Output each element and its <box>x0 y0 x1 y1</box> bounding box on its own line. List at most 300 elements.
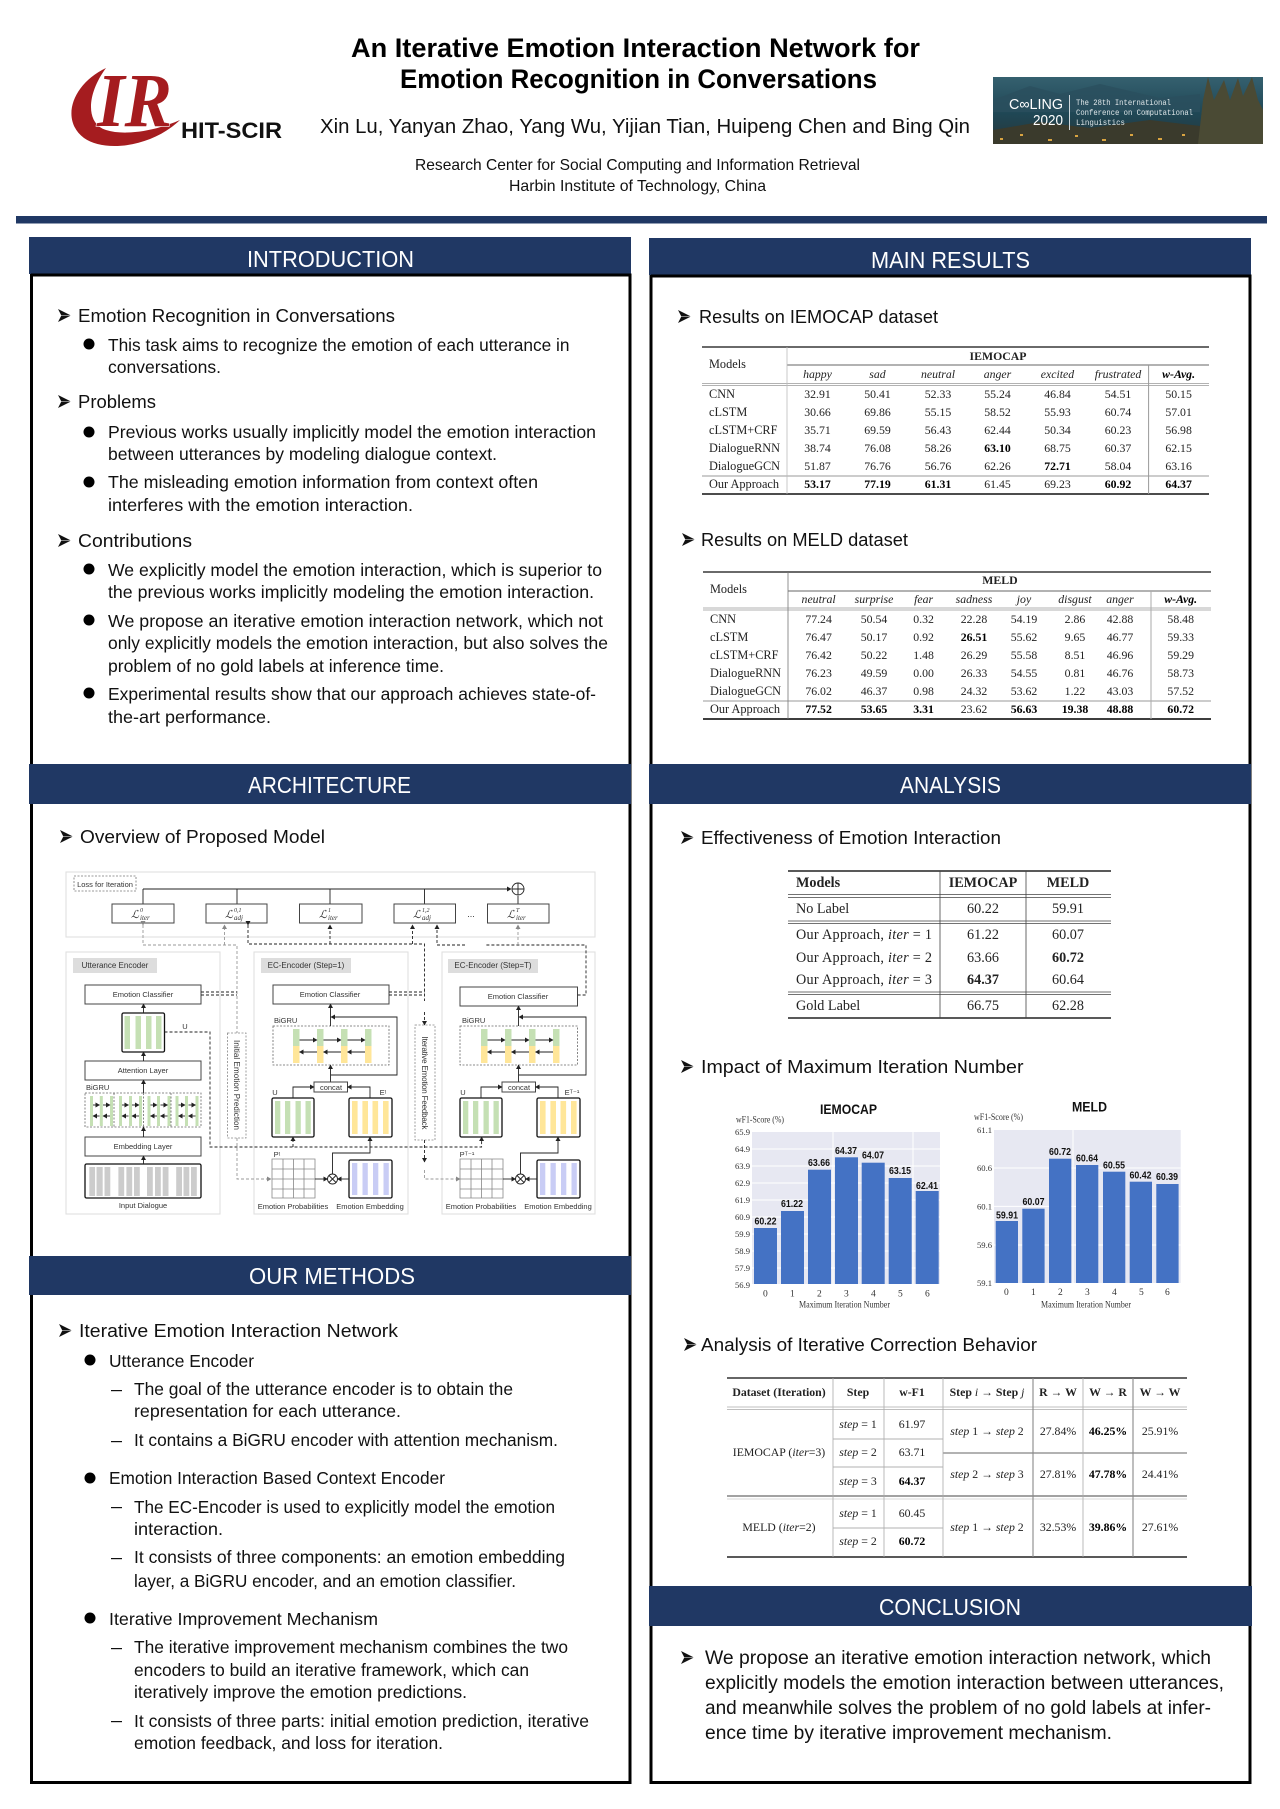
table: iemocap results: 56.98 <box>1165 423 1192 437</box>
heading: conclusion <box>649 1586 1252 1626</box>
table: meld results: w-Avg. <box>1164 592 1197 606</box>
ec-encoder step 1: BiGRU <box>274 1016 297 1025</box>
table: meld results: sadness <box>956 592 993 606</box>
logo: HIT-SCIR <box>71 59 282 146</box>
table: iemocap results: 57.01 <box>1165 405 1192 419</box>
table: correction behavior: Step <box>847 1385 870 1399</box>
table: meld results: 46.76 <box>1107 666 1133 680</box>
table: meld results: 0.98 <box>913 684 934 698</box>
bar chart: meld: wF1-Score (%) <box>974 1112 1023 1123</box>
bar chart: iemocap: 60.22 <box>754 1216 777 1227</box>
loss for iteration panel: adj <box>422 914 431 922</box>
text block: our methods: It contains a BiGRU encoder with attention mechanism. <box>134 1430 558 1450</box>
bar chart: iemocap: 65.9 <box>735 1127 750 1137</box>
affiliation: Harbin Institute of Technology, China <box>509 178 766 195</box>
table: meld results: 59.29 <box>1167 648 1194 662</box>
text block: conclusion: and meanwhile solves the problem of no gold labels at infer- <box>705 1697 1211 1719</box>
text block: conclusion: explicitly models the emotion interaction between utterances, <box>705 1672 1224 1694</box>
bar chart: iemocap: 2 <box>817 1290 822 1300</box>
bar chart: meld: Maximum Iteration Number <box>1041 1301 1132 1311</box>
ec-encoder step 1 <box>254 952 408 1214</box>
table: correction behavior: IEMOCAP (iter=3) <box>733 1445 825 1459</box>
table: iemocap results: 60.92 <box>1105 477 1131 491</box>
bar chart: iemocap: wF1-Score (%) <box>736 1115 784 1126</box>
table: effectiveness: Our Approach, iter = 2 <box>796 950 932 966</box>
table: iemocap results: 76.08 <box>864 441 891 455</box>
table: iemocap results: 62.44 <box>984 423 1011 437</box>
table: effectiveness: IEMOCAP <box>949 875 1018 891</box>
table: correction behavior: 60.72 <box>899 1534 925 1548</box>
loss for iteration panel: T <box>516 908 520 914</box>
table: iemocap results: 60.74 <box>1105 405 1131 419</box>
ec-encoder step T: Eᵀ⁻¹ <box>565 1088 580 1097</box>
text block: our methods: The EC-Encoder is used to explicitly model the emotion <box>134 1497 555 1517</box>
table: correction behavior: W → R <box>1089 1385 1127 1399</box>
heading: main results <box>649 238 1251 277</box>
table: meld results: anger <box>1106 592 1134 606</box>
bar chart: meld: 2 <box>1058 1288 1063 1298</box>
table: correction behavior: 46.25% <box>1089 1424 1127 1438</box>
ec-encoder step 1: Eᵗ <box>380 1088 387 1097</box>
table: iemocap results: 50.41 <box>864 387 891 401</box>
bar chart: meld: 60.42 <box>1130 1171 1152 1182</box>
text block: our methods: The goal of the utterance encoder is to obtain the <box>134 1379 513 1399</box>
table: meld results: 56.63 <box>1011 702 1037 716</box>
affiliation: Research Center for Social Computing and Information Retrieval <box>415 157 860 174</box>
table: iemocap results: CNN <box>709 387 735 401</box>
table: iemocap results: 62.26 <box>984 459 1011 473</box>
loss for iteration panel: ℒ <box>225 909 234 921</box>
table: iemocap results <box>702 347 1209 494</box>
table: meld results: cLSTM <box>710 630 748 644</box>
architecture diagram <box>66 872 595 1214</box>
table: meld results: 76.47 <box>805 630 832 644</box>
text block: introduction <box>58 305 608 727</box>
subheading: overview: Overview of Proposed Model <box>80 826 325 847</box>
bar chart: meld: 60.64 <box>1076 1154 1098 1165</box>
subheading: meld results: Results on MELD dataset <box>701 529 908 550</box>
table: iemocap results: 55.24 <box>984 387 1011 401</box>
bar chart: meld: 59.1 <box>977 1278 992 1288</box>
heading: analysis: ANALYSIS <box>900 772 1001 798</box>
table: effectiveness: 66.75 <box>967 998 999 1014</box>
bar chart: iemocap: 6 <box>925 1290 930 1300</box>
text block: our methods: Emotion Interaction Based Context Encoder <box>109 1468 445 1488</box>
text block: introduction: Emotion Recognition in Conversations <box>78 305 395 326</box>
table: correction behavior: step 1 → step 2 <box>950 1424 1024 1438</box>
table: meld results <box>703 572 1211 719</box>
table: iemocap results: 69.59 <box>864 423 891 437</box>
table: meld results: 60.72 <box>1167 702 1194 716</box>
table: iemocap results: 72.71 <box>1044 459 1071 473</box>
table: correction behavior: step = 2 <box>839 1534 877 1548</box>
utterance encoder panel: Utterance Encoder <box>82 961 149 970</box>
heading: main results: MAIN RESULTS <box>871 247 1030 273</box>
table: meld results: 19.38 <box>1062 702 1088 716</box>
utterance encoder panel <box>66 952 220 1214</box>
table: iemocap results: 61.45 <box>984 477 1011 491</box>
text block: conclusion: We propose an iterative emotion interaction network, which <box>705 1647 1211 1669</box>
loss for iteration panel: 0,1 <box>234 908 242 914</box>
table: iemocap results: 58.52 <box>984 405 1011 419</box>
table: correction behavior: w-F1 <box>899 1385 925 1399</box>
text block: our methods: interaction. <box>134 1519 223 1539</box>
table: iemocap results: DialogueRNN <box>709 441 780 455</box>
bar chart: meld: 6 <box>1165 1288 1170 1298</box>
logo: HIT-SCIR: HIT-SCIR <box>181 118 282 143</box>
table: correction behavior: 24.41% <box>1142 1467 1178 1481</box>
text block: our methods: representation for each utterance. <box>134 1401 401 1421</box>
text block: our methods: Utterance Encoder <box>109 1351 254 1371</box>
table: effectiveness: 60.72 <box>1052 950 1084 966</box>
table: meld results: 58.48 <box>1167 612 1194 626</box>
table: effectiveness: 60.07 <box>1052 927 1084 943</box>
bar chart: iemocap: 62.41 <box>916 1181 938 1192</box>
table: iemocap results: anger <box>984 367 1012 381</box>
logo: COLING 2020 banner: C∞LING <box>1009 96 1063 113</box>
text block: introduction: Experimental results show that our approach achieves state-of- <box>108 684 596 704</box>
table: meld results: 0.00 <box>913 666 934 680</box>
bar chart: meld: MELD <box>1072 1100 1107 1115</box>
table: correction behavior: step 2 → step 3 <box>950 1467 1024 1481</box>
bar chart: iemocap: 61.22 <box>781 1199 803 1210</box>
panel: left column <box>29 237 631 1782</box>
ec-encoder step 1: Pᵗ <box>274 1150 281 1159</box>
dashed connections <box>143 925 586 1179</box>
table: meld results: 22.28 <box>961 612 987 626</box>
text block: introduction: between utterances by modeling dialogue context. <box>108 444 497 464</box>
heading: introduction <box>29 237 631 276</box>
ec-encoder step 1: Emotion Probabilities <box>258 1202 328 1211</box>
text block: introduction: problem of no gold labels at inference time. <box>108 656 444 676</box>
bar chart: iemocap: 64.37 <box>835 1146 857 1157</box>
table: iemocap results: w-Avg. <box>1162 367 1195 381</box>
bar chart: iemocap: 64.07 <box>862 1151 884 1162</box>
bar chart: meld: 0 <box>1004 1288 1009 1298</box>
ec-encoder step 1: U <box>272 1088 278 1097</box>
loss for iteration panel: Loss for Iteration <box>77 880 133 889</box>
table: iemocap results: 62.15 <box>1165 441 1192 455</box>
table: iemocap results: 69.86 <box>864 405 891 419</box>
table: iemocap results: 54.51 <box>1105 387 1131 401</box>
table: effectiveness: 62.28 <box>1052 998 1084 1014</box>
bar chart: meld: 61.1 <box>977 1125 992 1135</box>
bar chart: iemocap: 63.15 <box>889 1166 911 1177</box>
initial emotion prediction <box>228 1033 246 1138</box>
table: iemocap results: DialogueGCN <box>709 459 780 473</box>
initial emotion prediction: Initial Emotion Prediction <box>232 1040 241 1130</box>
iterative emotion feedback: Iterative Emotion Feedback <box>420 1036 429 1130</box>
table: correction behavior: 39.86% <box>1089 1520 1127 1534</box>
table: iemocap results: 61.31 <box>925 477 951 491</box>
bar chart: iemocap <box>735 1102 940 1311</box>
table: effectiveness: Models <box>796 875 841 891</box>
text block: introduction: The misleading emotion information from context often <box>108 472 538 492</box>
iterative emotion feedback <box>415 1025 435 1140</box>
bar chart: iemocap: 3 <box>844 1290 849 1300</box>
bar chart: meld: 4 <box>1112 1288 1117 1298</box>
table: correction behavior: 64.37 <box>899 1474 925 1488</box>
table: meld results: 9.65 <box>1065 630 1085 644</box>
table: iemocap results: 55.93 <box>1044 405 1071 419</box>
title: Emotion Recognition in Conversations <box>400 64 877 94</box>
logo: COLING 2020 banner: The 28th International <box>1076 98 1171 108</box>
table: iemocap results: IEMOCAP <box>969 349 1027 363</box>
bar chart: iemocap: 63.9 <box>735 1161 750 1171</box>
table: meld results: 55.62 <box>1011 630 1037 644</box>
text block: our methods: Iterative Emotion Interaction Network <box>79 1320 399 1341</box>
utterance encoder panel: Attention Layer <box>118 1066 169 1075</box>
table: correction behavior: Dataset (Iteration) <box>732 1385 826 1399</box>
table: iemocap results: 60.37 <box>1105 441 1131 455</box>
table: meld results: 42.88 <box>1107 612 1133 626</box>
table: iemocap results: 58.26 <box>925 441 951 455</box>
bar chart: iemocap: 4 <box>871 1290 876 1300</box>
table: meld results: neutral <box>802 592 836 606</box>
ec-encoder step 1: concat <box>320 1083 343 1092</box>
table: correction behavior: Step i → Step j <box>950 1385 1024 1399</box>
table: effectiveness: No Label <box>796 901 849 917</box>
text block: introduction: Previous works usually implicitly model the emotion interaction <box>108 422 596 442</box>
table: iemocap results: Our Approach <box>709 477 779 491</box>
text block: introduction: interferes with the emotion interaction. <box>108 495 413 515</box>
table: iemocap results: 68.75 <box>1044 441 1071 455</box>
table: iemocap results: 56.43 <box>925 423 951 437</box>
table: meld results: 59.33 <box>1167 630 1194 644</box>
bar chart: iemocap: 5 <box>898 1290 903 1300</box>
loss for iteration panel: ℒ <box>319 909 328 921</box>
loss for iteration panel: iter <box>328 914 338 922</box>
text block: introduction: conversations. <box>108 357 221 377</box>
bar chart: iemocap: 57.9 <box>735 1263 750 1273</box>
loss for iteration panel <box>66 872 595 937</box>
text block: introduction: We explicitly model the emotion interaction, which is superior to <box>108 560 602 580</box>
table: meld results: 57.52 <box>1167 684 1194 698</box>
table: meld results: 55.58 <box>1011 648 1037 662</box>
table: meld results: Models <box>710 582 747 596</box>
table: iemocap results: happy <box>803 367 833 381</box>
table: correction behavior <box>727 1378 1187 1557</box>
table: meld results: 8.51 <box>1065 648 1085 662</box>
ec-encoder step T: Emotion Classifier <box>488 992 549 1001</box>
logo: COLING 2020 banner: Conference on Computational <box>1076 108 1193 118</box>
panel: right column <box>649 238 1252 1782</box>
text block: introduction: Contributions <box>78 530 192 551</box>
table: correction behavior: MELD (iter=2) <box>742 1520 816 1534</box>
ec-encoder step T: Pᵀ⁻¹ <box>460 1150 475 1159</box>
table: meld results: 46.37 <box>861 684 887 698</box>
table: meld results: 0.92 <box>913 630 934 644</box>
text block: our methods: iteratively improve the emotion predictions. <box>134 1682 467 1702</box>
table: correction behavior: step = 3 <box>839 1474 877 1488</box>
table: correction behavior: W → W <box>1140 1385 1181 1399</box>
ec-encoder step 1: Emotion Embedding <box>336 1202 404 1211</box>
bar chart: meld: 60.1 <box>977 1202 992 1212</box>
table: meld results: 54.19 <box>1011 612 1037 626</box>
loss for iteration panel: iter <box>516 914 526 922</box>
table: meld results: 26.29 <box>961 648 987 662</box>
table: meld results: 46.77 <box>1107 630 1133 644</box>
table: iemocap results: 64.37 <box>1165 477 1192 491</box>
table: correction behavior: 63.71 <box>899 1445 925 1459</box>
table: iemocap results: cLSTM <box>709 405 747 419</box>
table: iemocap results: 76.76 <box>864 459 891 473</box>
bar chart: meld: 60.72 <box>1049 1147 1071 1158</box>
loss for iteration panel: ℒ <box>413 909 422 921</box>
table: meld results: 50.22 <box>861 648 887 662</box>
table: iemocap results: 58.04 <box>1105 459 1131 473</box>
table: iemocap results: 46.84 <box>1044 387 1071 401</box>
text block: our methods: It consists of three parts: initial emotion prediction, iterative <box>134 1711 589 1731</box>
table: meld results: 24.32 <box>961 684 987 698</box>
subheading: correction behavior: Analysis of Iterative Correction Behavior <box>701 1334 1037 1355</box>
table: effectiveness: 59.91 <box>1052 901 1084 917</box>
table: meld results: DialogueRNN <box>710 666 781 680</box>
utterance encoder panel: Emotion Classifier <box>113 990 174 999</box>
loss for iteration panel: adj <box>234 914 243 922</box>
table: iemocap results: 35.71 <box>804 423 831 437</box>
table: meld results: 26.33 <box>961 666 987 680</box>
table: meld results: 2.86 <box>1065 612 1085 626</box>
table: iemocap results: neutral <box>921 367 956 381</box>
table: iemocap results: Models <box>709 357 746 371</box>
text block: introduction: We propose an iterative emotion interaction network, which not <box>108 611 603 631</box>
heading: conclusion: CONCLUSION <box>879 1594 1021 1620</box>
table: iemocap results: 77.19 <box>864 477 891 491</box>
table: meld results: 50.17 <box>861 630 887 644</box>
table: meld results: 76.02 <box>805 684 832 698</box>
table: meld results: 49.59 <box>861 666 887 680</box>
logo: COLING 2020 banner: 2020 <box>1033 112 1063 129</box>
subheading: impact of iteration: Impact of Maximum Iteration Number <box>701 1056 1024 1077</box>
loss for iteration panel: ℒ <box>131 909 140 921</box>
table: correction behavior: 27.84% <box>1040 1424 1076 1438</box>
table: iemocap results: 63.16 <box>1165 459 1192 473</box>
heading: architecture: ARCHITECTURE <box>248 772 411 798</box>
bar chart: meld: 60.39 <box>1156 1172 1178 1183</box>
bar chart: meld: 60.07 <box>1022 1197 1045 1208</box>
table: effectiveness: Gold Label <box>796 998 860 1014</box>
subheading: effectiveness: Effectiveness of Emotion Interaction <box>701 827 1001 848</box>
ec-encoder step 1: EC-Encoder (Step=1) <box>268 961 345 970</box>
ec-encoder step T: Emotion Embedding <box>524 1202 592 1211</box>
table: effectiveness: MELD <box>1047 875 1089 891</box>
table: correction behavior: 25.91% <box>1142 1424 1178 1438</box>
table: iemocap results: frustrated <box>1095 367 1141 381</box>
table: correction behavior: 47.78% <box>1089 1467 1127 1481</box>
bar chart: iemocap: 1 <box>790 1290 795 1300</box>
table: meld results: 0.32 <box>913 612 934 626</box>
logo: COLING 2020 banner: Linguistics <box>1076 118 1125 128</box>
subheading: iemocap results: Results on IEMOCAP dataset <box>699 306 938 327</box>
table: effectiveness: 60.22 <box>967 901 999 917</box>
bar chart: meld: 59.91 <box>996 1211 1018 1222</box>
table: meld results: CNN <box>710 612 736 626</box>
table: meld results: 1.48 <box>913 648 934 662</box>
table: meld results: disgust <box>1058 592 1092 606</box>
utterance encoder panel: Input Dialogue <box>119 1201 167 1210</box>
title <box>351 33 920 94</box>
heading: analysis <box>649 764 1251 804</box>
table: meld results: 26.51 <box>961 630 987 644</box>
table: effectiveness: Our Approach, iter = 3 <box>796 972 932 988</box>
ec-encoder step T <box>442 952 595 1214</box>
text block: our methods: It consists of three components: an emotion embedding <box>134 1547 565 1567</box>
loss for iteration panel: iter <box>140 914 150 922</box>
text block: introduction: This task aims to recognize the emotion of each utterance in <box>108 335 570 355</box>
table: meld results: DialogueGCN <box>710 684 781 698</box>
bar chart: iemocap: 64.9 <box>735 1144 750 1154</box>
table: correction behavior: R → W <box>1039 1385 1077 1399</box>
loss for iteration panel: 0 <box>140 908 143 914</box>
table: meld results: 3.31 <box>913 702 934 716</box>
text block: our methods <box>59 1320 589 1753</box>
table: correction behavior: 32.53% <box>1040 1520 1076 1534</box>
loss for iteration panel: 1,2 <box>422 908 430 914</box>
table: meld results: cLSTM+CRF <box>710 648 779 662</box>
table: effectiveness: 60.64 <box>1052 972 1084 988</box>
utterance encoder panel: Embedding Layer <box>114 1142 173 1151</box>
bar chart: iemocap: 60.9 <box>735 1212 750 1222</box>
bar chart: meld: 59.6 <box>977 1240 993 1250</box>
bar chart: meld: 60.6 <box>977 1163 993 1173</box>
table: correction behavior: 60.45 <box>899 1506 925 1520</box>
table: iemocap results: 56.76 <box>925 459 951 473</box>
table: effectiveness: 61.22 <box>967 927 999 943</box>
table: iemocap results: 53.17 <box>804 477 831 491</box>
title: An Iterative Emotion Interaction Network for <box>351 33 920 63</box>
heading: our methods: OUR METHODS <box>249 1263 415 1289</box>
affiliation <box>415 157 860 195</box>
table: meld results: 43.03 <box>1107 684 1133 698</box>
bar chart: iemocap: Maximum Iteration Number <box>799 1301 891 1311</box>
heading: architecture <box>29 764 631 804</box>
loss for iteration panel: ... <box>467 909 475 919</box>
logo: COLING 2020 banner <box>993 77 1263 144</box>
table: meld results: 53.62 <box>1011 684 1037 698</box>
utterance encoder panel: U <box>182 1022 188 1031</box>
heading: our methods <box>29 1256 631 1295</box>
table: iemocap results: 50.34 <box>1044 423 1071 437</box>
bar chart: iemocap: 61.9 <box>735 1195 750 1205</box>
ec-encoder step T: concat <box>508 1083 531 1092</box>
bar chart: iemocap: 59.9 <box>735 1229 750 1239</box>
table: correction behavior: 27.81% <box>1040 1467 1076 1481</box>
bar chart: iemocap: 58.9 <box>735 1246 750 1256</box>
table: iemocap results: 38.74 <box>804 441 831 455</box>
table: effectiveness: Our Approach, iter = 1 <box>796 927 932 943</box>
table: meld results: 48.88 <box>1107 702 1133 716</box>
bar chart: meld: 3 <box>1085 1288 1090 1298</box>
table: meld results: 76.42 <box>805 648 832 662</box>
table: meld results: fear <box>914 592 934 606</box>
table: correction behavior: step = 2 <box>839 1445 877 1459</box>
ec-encoder step T: Emotion Probabilities <box>446 1202 516 1211</box>
table: iemocap results: 55.15 <box>925 405 951 419</box>
text block: introduction: only explicitly models the emotion interaction, but also solves the <box>108 633 608 653</box>
text block: conclusion: ence time by iterative improvement mechanism. <box>705 1722 1112 1744</box>
loss for iteration panel: 1 <box>328 908 331 914</box>
heading: introduction: INTRODUCTION <box>247 246 414 272</box>
text block: introduction: Problems <box>78 391 156 412</box>
table: iemocap results: sad <box>869 367 886 381</box>
table: meld results: 58.73 <box>1167 666 1194 680</box>
table: meld results: 77.52 <box>805 702 832 716</box>
table: effectiveness: 64.37 <box>967 972 999 988</box>
table: correction behavior: step = 1 <box>839 1417 877 1431</box>
table: meld results: 46.96 <box>1107 648 1133 662</box>
table: meld results: 1.22 <box>1065 684 1085 698</box>
